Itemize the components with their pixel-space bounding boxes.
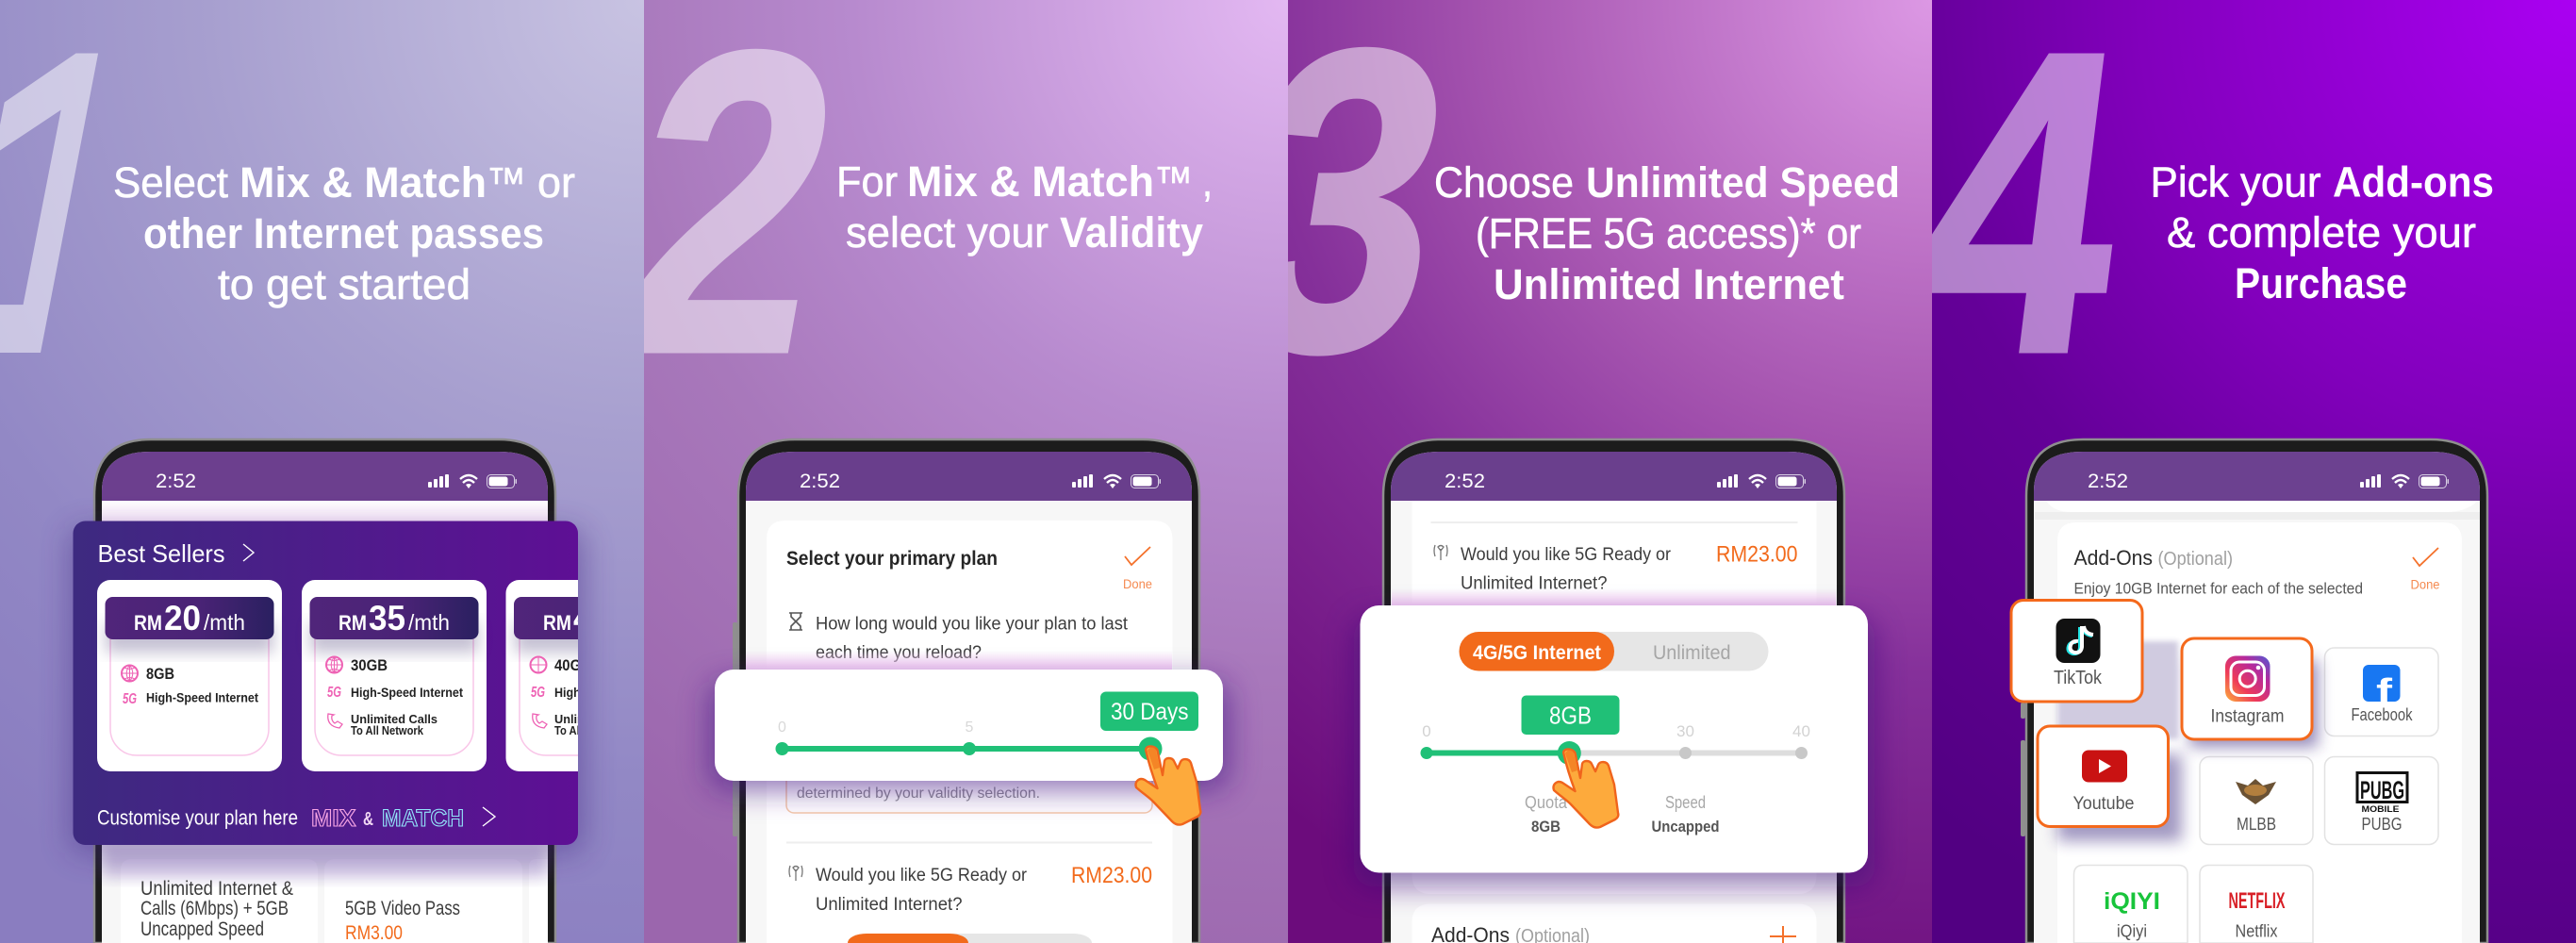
customise plan link: &: [363, 809, 373, 830]
plan card on screen: [785, 547, 1153, 943]
plan card: RM20: RM: [134, 611, 162, 635]
tile: Facebook: Facebook: [2352, 705, 2413, 724]
speed value: Speed: [1665, 793, 1706, 812]
best sellers heading: Best Sellers: [98, 539, 224, 568]
tile: iQiyi: iQIYI: [2104, 888, 2160, 915]
icon: pointing hand: [1136, 746, 1200, 825]
validity question: [816, 613, 1129, 663]
heading: step 3: (FREE 5G access)* or: [1476, 209, 1861, 257]
icon: done check: Done: [1123, 576, 1152, 591]
slider track: [1420, 741, 1808, 765]
price: RM23.00: [1071, 863, 1152, 888]
customise plan link: MIX: [311, 805, 356, 832]
status bar: [102, 452, 548, 501]
plan card: RM35: To All Network: [351, 723, 424, 737]
panel: step 2: [591, 0, 1288, 943]
add-ons card: Add-Ons: [2074, 546, 2153, 570]
tile: Instagram selected: Instagram: [2210, 707, 2284, 726]
heading: step 4: [2150, 158, 2494, 307]
card: best sellers: [74, 521, 578, 845]
tile: Netflix: [2200, 866, 2313, 943]
status bar: [1391, 452, 1837, 501]
plan card: partial third: 40: [573, 599, 610, 637]
toggle: Unlimited: [1653, 642, 1731, 664]
customise plan link: MATCH: [382, 805, 464, 832]
plan card: partial third: 40GB: [554, 656, 591, 674]
plan card: RM35: Unlimited Calls: [351, 712, 438, 726]
5G question: Unlimited Internet?: [1461, 573, 1608, 594]
heading: step 2: Mix & Match: [907, 157, 1154, 206]
status bar: 2:52: [800, 471, 840, 492]
tile: iQiyi: iQiyi: [2117, 922, 2147, 941]
heading: step 4: Pick your: [2150, 158, 2321, 206]
plan card: RM20: 8GB: [146, 665, 174, 683]
best sellers heading: [100, 543, 255, 562]
selected tile shadows: [2057, 641, 2318, 841]
phone frame: [1383, 439, 1844, 943]
validity question: How long would you like your plan to last: [816, 613, 1129, 634]
heading: step 2: ,: [1202, 157, 1213, 206]
heading: step 1: other Internet passes: [143, 209, 544, 257]
tile: Facebook: f: [2376, 672, 2392, 712]
tile: PUBG: [2325, 756, 2438, 845]
heading: step 2: ™: [1154, 157, 1193, 206]
5G question: Would you like 5G Ready or: [816, 865, 1027, 885]
heading: step 3: Choose: [1434, 158, 1574, 207]
tile: Youtube selected: [2038, 726, 2169, 826]
status bar: 2:52: [2088, 471, 2128, 492]
plan card: RM20: [97, 580, 282, 771]
plan card: RM20: /mth: [204, 610, 245, 635]
passes list behind card: 5GB Video Pass: [345, 898, 460, 919]
plan card: RM35: 30GB: [351, 656, 388, 674]
validity pill: 30 Days: [1111, 699, 1188, 725]
slider shadow: [1354, 618, 1874, 886]
tile: PUBG: PUBG: [2361, 815, 2403, 834]
customise plan link: Customise your plan here: [97, 805, 298, 830]
heading: step 3: [1434, 158, 1900, 308]
add-ons card on screen: [1412, 903, 1816, 943]
quota value: [1525, 793, 1568, 835]
passes list behind card: [102, 845, 548, 943]
icon: hourglass: [789, 613, 802, 630]
heading: step 2: For: [836, 157, 898, 206]
validity note: [785, 781, 1153, 814]
phone frame: [94, 439, 555, 943]
glow: [1392, 588, 1836, 605]
heading: step 1: ™: [487, 158, 526, 207]
speed value: Uncapped: [1652, 818, 1720, 835]
icon: pointing hand: [1554, 749, 1618, 828]
plan card on screen: [1412, 501, 1816, 894]
5G question: [1461, 544, 1671, 594]
heading: step 4: Purchase: [2235, 259, 2407, 307]
icon: antenna: [789, 866, 802, 881]
tile: Netflix: NETFLIX: [2229, 888, 2286, 914]
tile: iQiyi: [2074, 866, 2188, 943]
tile: TikTok selected: TikTok: [2054, 668, 2103, 688]
quota value: 8GB: [1531, 818, 1560, 835]
quota card: [1360, 605, 1868, 873]
price: RM23.00: [1716, 541, 1797, 568]
heading: step 1: Select: [113, 158, 228, 207]
5G question: Unlimited Internet?: [816, 894, 963, 915]
heading: step 1: to get started: [218, 260, 471, 308]
add-ons card: (Optional): [2157, 549, 2233, 570]
toggle: 4G/5G Internet: [1473, 642, 1601, 664]
plan card: partial third: RM: [543, 611, 571, 635]
tile: Netflix: Netflix: [2235, 922, 2278, 941]
customise plan link: [98, 807, 496, 829]
icon: done check: [1123, 547, 1152, 591]
add-ons card: [2057, 522, 2462, 943]
icon: done check: Done: [2410, 577, 2440, 592]
heading: step 2: [836, 157, 1213, 256]
status bar: 2:52: [156, 471, 196, 492]
passes list behind card: Unlimited Internet &: [140, 878, 293, 900]
slider scale labels: 40: [1792, 722, 1810, 740]
plan card title: Select your primary plan: [786, 548, 998, 570]
tile: MLBB: MLBB: [2237, 815, 2276, 834]
5G question: [816, 868, 1027, 910]
heading: step 2: Validity: [1060, 208, 1203, 256]
heading: step 2: select your: [846, 208, 1049, 256]
quota pill: [1522, 696, 1620, 735]
panel: step 4: [1897, 0, 2576, 943]
slider card: 0: [778, 720, 786, 736]
slider shadow: [709, 681, 1230, 790]
plan card: RM35: 5G: [327, 685, 341, 701]
tile: MLBB: [2200, 756, 2313, 845]
slider scale labels: 30: [1676, 722, 1694, 740]
plan card: partial third: To All Network: [554, 723, 628, 737]
status bar: [2034, 452, 2480, 501]
validity note: determined by your validity selection.: [797, 786, 1040, 802]
slider scale labels: [1422, 722, 1810, 740]
plan card: RM35: High-Speed Internet: [351, 685, 463, 700]
validity pill: [1100, 692, 1198, 731]
side buttons: [2021, 703, 2025, 836]
slider scale labels: 0: [1422, 722, 1431, 740]
heading: step 1: or: [537, 158, 575, 207]
toggle: [848, 934, 1092, 943]
validity question: each time you reload?: [816, 642, 982, 663]
heading: step 4: Add-ons: [2333, 158, 2494, 206]
tile: Facebook: [2325, 648, 2438, 736]
quota pill: 8GB: [1549, 702, 1592, 730]
status bar: 2:52: [1445, 471, 1485, 492]
icon: done check: [2410, 548, 2440, 592]
panel: step 3: [1209, 0, 1932, 943]
plan card: RM35: RM: [339, 611, 367, 635]
slider card: 5: [966, 720, 974, 736]
plan card: partial third: High-Speed Internet: [554, 685, 667, 700]
tile: PUBG: MOBILE: [2361, 804, 2399, 814]
plan card: partial third: 5G: [531, 685, 545, 701]
passes list behind card: Uncapped Speed: [140, 918, 264, 940]
plan card: RM20: 5G: [123, 691, 137, 707]
icon: antenna: [1434, 545, 1447, 560]
phone frame: [738, 439, 1199, 943]
tile: Instagram selected: [2182, 638, 2312, 739]
screen background: [102, 501, 548, 529]
plan card: RM35: 35: [369, 599, 405, 637]
passes list behind card: Calls (6Mbps) + 5GB: [140, 898, 289, 919]
quota value: Quota: [1525, 793, 1568, 812]
tile: TikTok selected: [2011, 600, 2142, 702]
panel: step 1: [0, 0, 690, 943]
heading: step 1: [113, 158, 575, 308]
tile: PUBG: PUBG: [2360, 776, 2404, 804]
add-ons card: Enjoy 10GB Internet for each of the selected: [2074, 581, 2363, 598]
previous card edge: [2037, 501, 2478, 512]
speed value: [1652, 793, 1720, 835]
toggle: [1460, 632, 1769, 671]
plan card: RM20: 20: [164, 599, 201, 637]
plan card: partial third: [505, 580, 578, 771]
card shadow: [70, 528, 585, 853]
heading: step 4: & complete your: [2167, 208, 2476, 256]
5G question: Would you like 5G Ready or: [1461, 544, 1671, 565]
slider track: [775, 737, 1162, 760]
heading: step 1: Mix & Match: [239, 158, 487, 207]
phone frame: [2026, 439, 2487, 943]
slider glow: [746, 651, 1172, 670]
tile: Youtube selected: Youtube: [2072, 794, 2135, 814]
plan card: RM20: High-Speed Internet: [146, 690, 258, 705]
slider card: [715, 670, 1223, 781]
side buttons: [733, 622, 737, 836]
heading: step 3: Unlimited Speed: [1586, 158, 1900, 207]
plan card: partial third: Unlimited Calls: [554, 712, 641, 726]
heading: step 3: Unlimited Internet: [1494, 260, 1844, 308]
plan card: RM35: /mth: [408, 610, 450, 635]
status bar: [746, 452, 1192, 501]
plan card: RM35: [302, 580, 487, 771]
